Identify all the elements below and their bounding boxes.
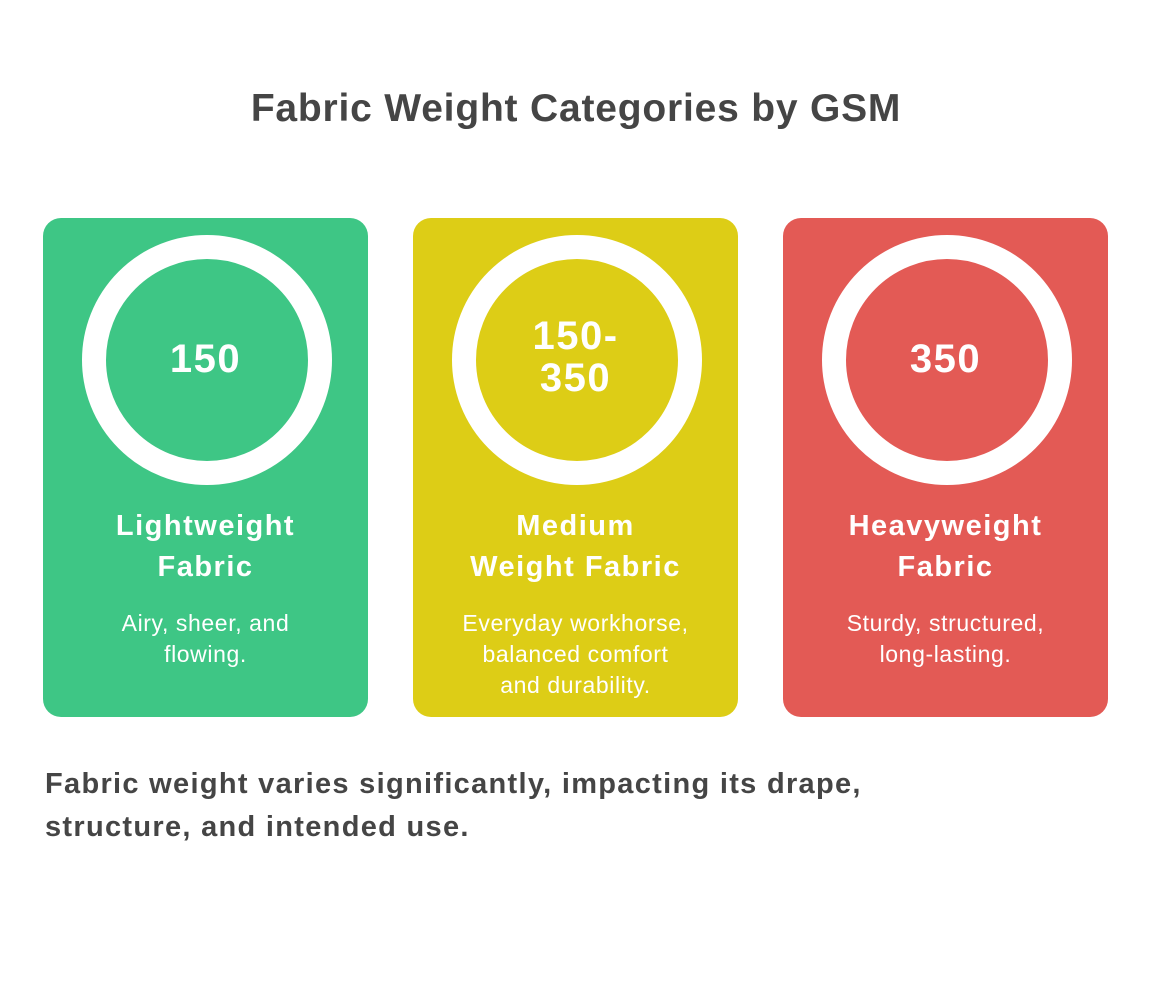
heading: lightweight: Lightweight [116,510,295,542]
description: heavyweight: long-lasting. [880,641,1011,667]
description: medium: balanced comfort [482,641,669,667]
heading: medium [470,510,681,583]
panel: heavyweight [783,218,1108,717]
panel: lightweight [43,218,368,717]
ring: 150 [82,235,332,485]
heading: medium: Medium [516,510,635,542]
description: lightweight: Airy, sheer, and [122,610,289,636]
heading: medium: Weight Fabric [470,551,681,583]
panel: medium [413,218,738,717]
number: 150: 150 [170,337,241,381]
heading: lightweight: Fabric [157,551,254,583]
number: 150-350: 150- [532,314,619,358]
number: 350: 350 [910,337,981,381]
summary text: structure, and intended use. [45,811,470,843]
heading: heavyweight: Heavyweight [849,510,1042,542]
description: lightweight: flowing. [164,641,247,667]
description: medium: and durability. [500,672,651,698]
description: medium [462,610,689,698]
description: heavyweight [847,610,1044,667]
description: lightweight [122,610,289,667]
ring: 350 [822,235,1072,485]
number: 150-350: 350 [540,356,611,400]
description: medium: Everyday workhorse, [462,610,689,636]
title: Fabric Weight Categories by GSM [251,87,901,130]
heading: lightweight [116,510,295,583]
description: heavyweight: Sturdy, structured, [847,610,1044,636]
number: 150-350 [532,314,619,400]
heading: heavyweight [849,510,1042,583]
ring: 150-350 [452,235,702,485]
summary text: Fabric weight varies significantly, impacting its drape, [45,768,862,800]
heading: heavyweight: Fabric [897,551,994,583]
summary text [45,768,862,843]
